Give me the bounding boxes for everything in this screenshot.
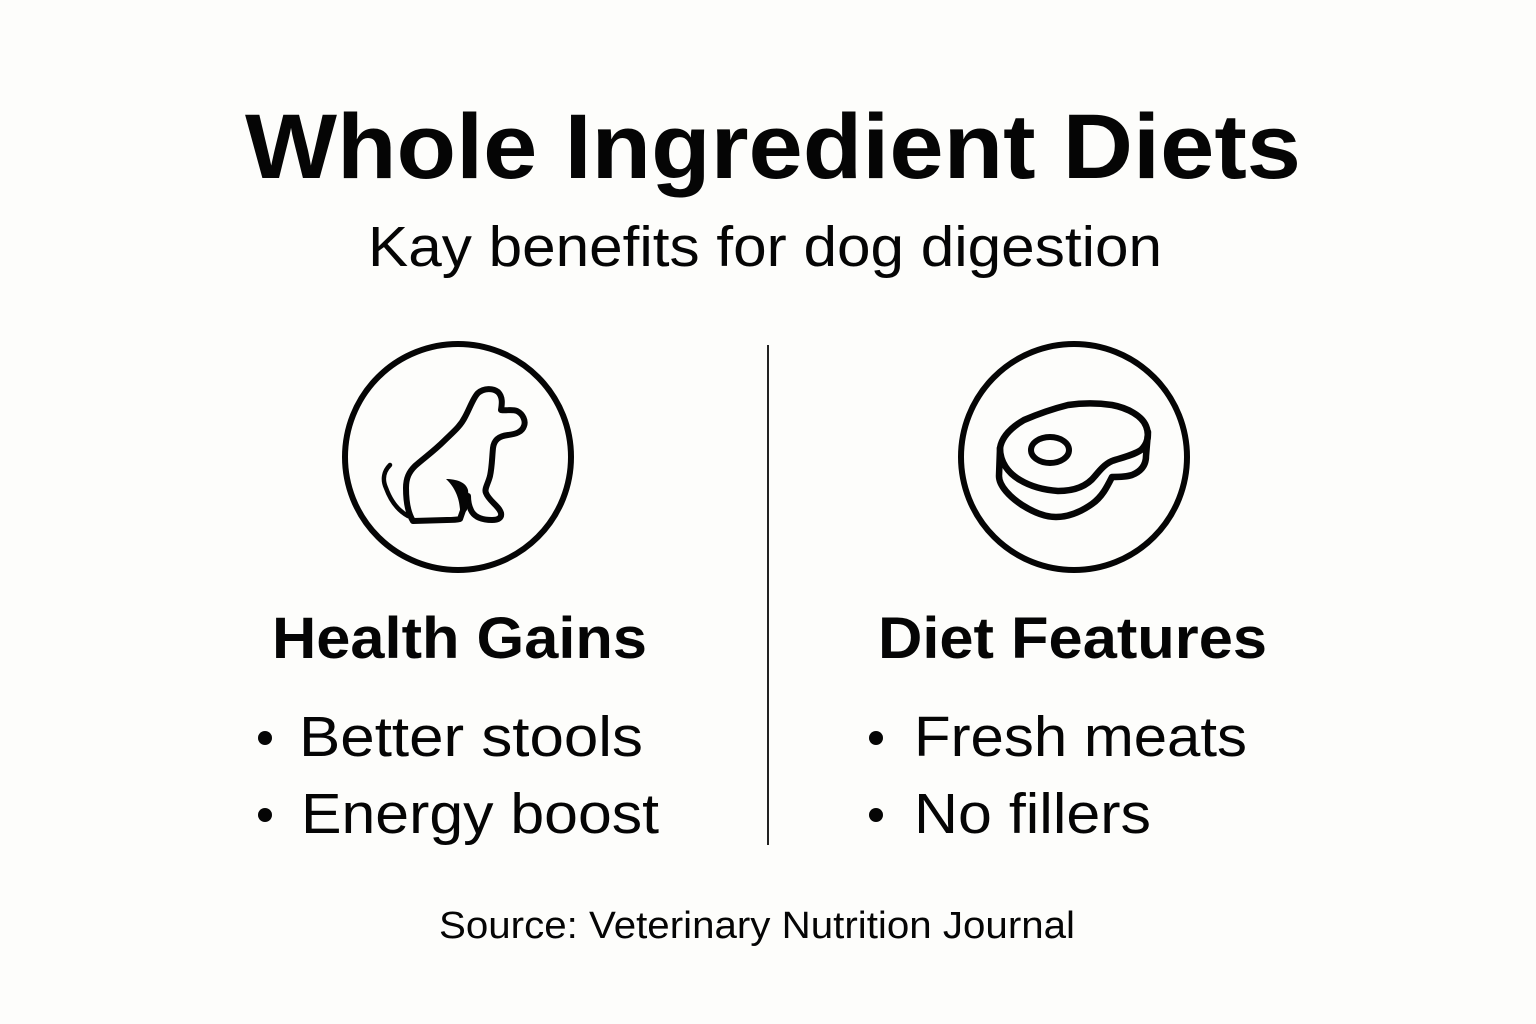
subtitle: Kay benefits for dog digestion [368,215,1162,279]
list: diet features [869,705,1247,846]
list: diet features: Fresh meats [914,705,1247,769]
list: health gains [258,705,659,846]
list: health gains: Better stools [299,705,643,769]
heading: diet features: Diet Features [878,606,1267,671]
list: health gains: Energy boost [301,782,659,846]
icon: sitting dog in circle [345,344,571,570]
icon: steak in circle [961,344,1187,570]
source note: Source: Veterinary Nutrition Journal [439,905,1075,947]
panel: health gains [258,344,659,846]
list: diet features: No fillers [914,782,1151,846]
heading: health gains: Health Gains [272,606,647,671]
panel: diet features [869,344,1267,846]
title: Whole Ingredient Diets [245,96,1301,198]
